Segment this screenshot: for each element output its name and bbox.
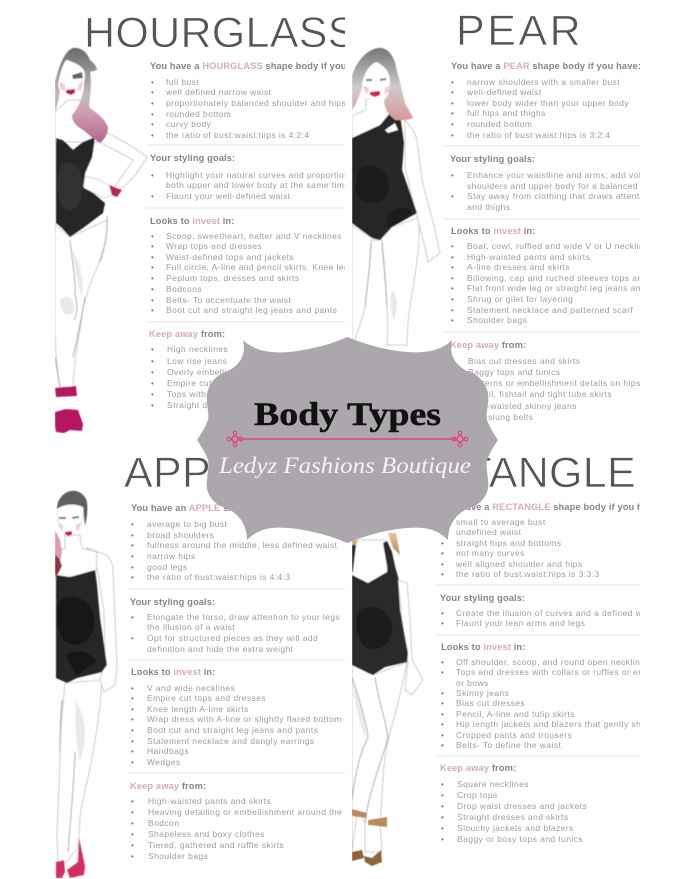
list: rectangle keep away: •: [441, 791, 444, 800]
list: rectangle traits: small to average bust: [456, 517, 546, 527]
list: pear looks: Flat front wide leg or straight leg jeans and: [467, 283, 646, 293]
list: apple keep away: •: [131, 841, 134, 850]
list: pear traits: •: [451, 99, 454, 108]
list: rectangle traits: •: [441, 560, 444, 569]
badge plaque: [197, 337, 498, 543]
heading: keep away from: Keep away from:: [130, 781, 206, 791]
list: apple styling goals: the illusion of a waist: [147, 622, 235, 632]
list: apple traits: •: [131, 573, 134, 582]
list: pear looks: High-waisted pants and skirts: [467, 252, 590, 262]
list: apple keep away: Shapeless and boxy clothes: [148, 829, 265, 839]
list: hourglass looks: [151, 233, 345, 314]
list: rectangle keep away: Straight dresses and skirts: [457, 812, 568, 822]
list: pear traits: rounded bottom: [467, 119, 532, 129]
list: apple looks: •: [131, 715, 134, 724]
list: rectangle looks: Tops and dresses with collars or ruffles or embellishments: [456, 667, 696, 677]
list: rectangle keep away: [441, 779, 587, 844]
list: hourglass keep away: •: [151, 368, 154, 377]
list: hourglass keep away: •: [151, 390, 154, 399]
heading: keep away from: Keep away from:: [149, 329, 225, 339]
list: hourglass looks: •: [151, 296, 154, 305]
list: rectangle keep away: •: [441, 824, 444, 833]
list: hourglass keep away: •: [151, 345, 154, 354]
heading: looks to invest in: Looks to invest in:: [441, 642, 525, 652]
list: pear styling goals: •: [451, 171, 454, 180]
list: hourglass looks: •: [151, 285, 154, 294]
figure: hourglass illustration: [55, 48, 147, 433]
list: pear traits: full hips and thighs: [467, 108, 546, 118]
list: apple looks: •: [131, 705, 134, 714]
list: hourglass looks: •: [151, 232, 154, 241]
list: pear keep away: Patterns or embellishment details on hips: [468, 378, 641, 388]
list: apple traits: •: [131, 552, 134, 561]
list: hourglass styling goals: both upper and lower body at the same time: [166, 180, 350, 190]
list: pear traits: •: [451, 88, 454, 97]
list: hourglass traits: •: [151, 120, 154, 129]
list: apple keep away: [131, 796, 342, 861]
list: apple styling goals: •: [131, 634, 134, 643]
list: rectangle styling goals: Create the illusion of curves and a defined waist: [456, 608, 657, 618]
list: rectangle looks: Pencil, A-line and tulip skirts: [456, 709, 575, 719]
list: hourglass keep away: Low rise jeans: [167, 356, 227, 366]
list: apple looks: •: [131, 694, 134, 703]
list: rectangle looks: •: [441, 720, 444, 729]
list: hourglass looks: Full circle, A-line and pencil skirts. Knee length: [166, 262, 362, 272]
list: rectangle traits: not many curves: [456, 548, 525, 558]
list: pear traits: the ratio of bust:waist:hips is 3:2:4: [467, 130, 611, 140]
list: pear traits: •: [451, 109, 454, 118]
list: pear looks: Shrug or gilet for layering: [467, 294, 573, 304]
list: rectangle keep away: Baggy or boxy tops and tunics: [457, 834, 583, 844]
list: apple looks: V and wide necklines: [147, 683, 235, 693]
badge title: Body Types: [254, 397, 441, 433]
list: hourglass styling goals: •: [151, 171, 154, 180]
list: rectangle styling goals: •: [441, 619, 444, 628]
ornamental divider: [227, 431, 468, 447]
list: hourglass keep away: Overly embellished tops: [167, 367, 267, 377]
list: hourglass keep away: •: [151, 379, 154, 388]
list: apple looks: Knee length A-line skirts: [147, 704, 249, 714]
list: pear looks: •: [451, 295, 454, 304]
panel: rectangle: [352, 449, 696, 866]
list: hourglass traits: •: [151, 110, 154, 119]
list: hourglass traits: rounded bottom: [166, 109, 231, 119]
title: pear: PEAR: [456, 7, 581, 55]
panel: apple: [55, 449, 345, 878]
list: hourglass traits: full bust: [166, 77, 199, 87]
list: rectangle styling goals: [441, 610, 640, 628]
list: rectangle keep away: Slouchy jackets and blazers: [457, 823, 574, 833]
list: pear styling goals: •: [451, 192, 454, 201]
list: apple traits: •: [131, 563, 134, 572]
list: rectangle keep away: •: [441, 780, 444, 789]
list: apple traits: the ratio of bust:waist:hips is 4:4:3: [147, 572, 291, 582]
list: apple traits: •: [131, 531, 134, 540]
list: rectangle traits: straight hips and bottoms: [456, 538, 561, 548]
list: apple keep away: •: [131, 852, 134, 861]
list: hourglass looks: Wrap tops and dresses: [166, 241, 262, 251]
heading: keep away from: Keep away from:: [440, 763, 516, 773]
list: apple looks: •: [131, 684, 134, 693]
list: hourglass traits: •: [151, 131, 154, 140]
list: pear traits: •: [451, 120, 454, 129]
list: hourglass traits: •: [151, 99, 154, 108]
list: rectangle looks: Bias cut dresses: [456, 698, 525, 708]
list: hourglass keep away: •: [151, 357, 154, 366]
list: hourglass looks: Bodcons: [166, 284, 202, 294]
list: pear traits: well-defined waist: [466, 87, 542, 97]
list: hourglass keep away: [151, 346, 228, 410]
heading: styling goals: Your styling goals:: [130, 597, 215, 607]
list: pear looks: Shoulder bags: [467, 315, 527, 325]
list: rectangle looks: •: [441, 689, 444, 698]
list: pear looks: •: [451, 316, 454, 325]
list: rectangle looks: [441, 657, 696, 750]
list: pear traits: lower body wider than your upper body: [467, 98, 629, 108]
heading: styling goals: Your styling goals:: [450, 154, 535, 164]
list: rectangle looks: Belts- To define the waist: [456, 740, 561, 750]
list: pear styling goals: [451, 172, 640, 212]
list: pear looks: A-line dresses and skirts: [467, 262, 570, 272]
heading: keep away from: Keep away from:: [450, 340, 526, 350]
list: hourglass keep away: Tops with details: [167, 389, 237, 399]
list: rectangle traits: •: [441, 570, 444, 579]
list: apple traits: good legs: [147, 562, 188, 572]
list: rectangle traits: •: [441, 539, 444, 548]
list: rectangle traits: undefined waist: [456, 527, 522, 537]
list: hourglass looks: •: [151, 263, 154, 272]
heading: looks to invest in: Looks to invest in:: [451, 226, 535, 236]
list: hourglass looks: Belts- To accentuate the waist: [166, 295, 292, 305]
list: hourglass keep away: High necklines: [167, 344, 228, 354]
list: hourglass traits: [151, 77, 346, 140]
list: hourglass styling goals: •: [151, 192, 154, 201]
list: apple traits: •: [131, 520, 134, 529]
list: apple traits: average to big bust: [147, 519, 227, 529]
list: pear keep away: Low-slung belts: [468, 412, 533, 422]
list: pear looks: Boat, cowl, ruffled and wide V or U necklines: [467, 241, 654, 251]
heading: styling goals: Your styling goals:: [150, 153, 235, 163]
list: rectangle looks: •: [441, 699, 444, 708]
list: apple keep away: •: [131, 808, 134, 817]
list: apple traits: broad shoulders: [147, 530, 214, 540]
list: rectangle keep away: Square necklines: [457, 779, 529, 789]
list: apple traits: [131, 519, 338, 582]
list: apple keep away: •: [131, 819, 134, 828]
list: pear looks: •: [451, 306, 454, 315]
list: rectangle looks: •: [441, 668, 444, 677]
figure: pear illustration: [352, 48, 440, 345]
list: rectangle traits: the ratio of bust:waist:hips is 3:3:3: [456, 569, 600, 579]
list: hourglass keep away: Empire cut tops: [167, 378, 232, 388]
list: apple keep away: High-waisted pants and skirts: [148, 796, 271, 806]
list: pear looks: •: [451, 274, 454, 283]
list: hourglass traits: proportionately balanced shoulder and hips: [166, 98, 346, 108]
list: pear styling goals: shoulders and upper body for a balanced look: [467, 181, 658, 191]
list: hourglass looks: •: [151, 306, 154, 315]
list: apple styling goals: Elongate the torso, draw attention to your legs: [147, 612, 340, 622]
list: rectangle keep away: •: [441, 835, 444, 844]
list: apple keep away: Heaving detailing or embellishment around the: [148, 807, 342, 817]
figure: apple illustration: [55, 491, 117, 878]
list: rectangle traits: well aligned shoulder and hips: [455, 559, 582, 569]
list: rectangle looks: •: [441, 658, 444, 667]
list: pear looks: Billowing, cap and ruched sleeves tops and: [467, 273, 648, 283]
list: rectangle keep away: •: [441, 813, 444, 822]
list: rectangle styling goals: •: [441, 609, 444, 618]
list: apple looks: Wrap dress with A-line or slightly flared bottom: [147, 714, 342, 724]
list: rectangle looks: or bows: [456, 678, 489, 688]
heading: styling goals: Your styling goals:: [440, 593, 525, 603]
badge subtitle: Ledyz Fashions Boutique: [218, 453, 471, 478]
list: hourglass traits: the ratio of bust:waist:hips is 4:2:4: [166, 130, 310, 140]
list: rectangle looks: •: [441, 710, 444, 719]
list: pear looks: •: [451, 242, 454, 251]
list: pear keep away: [468, 358, 640, 422]
list: apple traits: narrow hips: [147, 551, 196, 561]
list: hourglass looks: Waist-defined tops and jackets: [166, 252, 294, 262]
list: hourglass traits: well defined narrow waist: [165, 87, 272, 97]
title: rectangle: RECTANGLE: [374, 449, 636, 497]
list: apple looks: Handbags: [147, 746, 189, 756]
list: rectangle traits: •: [441, 549, 444, 558]
list: apple traits: fullness around the middle, less defined waist: [147, 540, 338, 550]
list: pear looks: [451, 241, 654, 325]
list: hourglass styling goals: Flaunt your well-defined waist: [166, 191, 291, 201]
list: pear styling goals: Enhance your waistline and arms; add volume to: [467, 170, 670, 180]
panel: pear: [352, 7, 683, 422]
intro heading: You have a HOURGLASS shape body if you: [150, 61, 347, 71]
list: apple styling goals: •: [131, 613, 134, 622]
list: hourglass looks: Peplum tops, dresses and skirts: [166, 273, 300, 283]
heading: looks to invest in: Looks to invest in:: [131, 667, 215, 677]
list: pear keep away: Baggy tops and tunics: [468, 367, 560, 377]
central badge: [197, 337, 498, 543]
list: rectangle keep away: Drop waist dresses and jackets: [457, 801, 587, 811]
title: hourglass: HOURGLASS: [84, 9, 357, 57]
list: apple keep away: •: [131, 797, 134, 806]
list: hourglass looks: Boot cut and straight leg jeans and pants: [166, 305, 337, 315]
list: apple traits: •: [131, 541, 134, 550]
list: pear looks: •: [451, 263, 454, 272]
intro heading: You have an APPLE shape body if you have:: [131, 503, 332, 513]
list: pear keep away: Pencil, fishtail and tight tube skirts: [468, 389, 612, 399]
figure: rectangle illustration: [352, 533, 423, 866]
list: rectangle styling goals: Flaunt your lean arms and legs: [456, 618, 585, 628]
list: rectangle looks: Cropped pants and trousers: [456, 730, 572, 740]
list: hourglass traits: •: [151, 78, 154, 87]
list: rectangle traits: [441, 517, 600, 579]
list: hourglass looks: Scoop, sweetheart, halter and V necklines: [166, 231, 342, 241]
list: rectangle looks: •: [441, 741, 444, 750]
list: hourglass styling goals: Highlight your natural curves and proportions: [166, 170, 354, 180]
list: pear looks: •: [451, 284, 454, 293]
list: pear keep away: •: [452, 357, 455, 366]
list: apple styling goals: [131, 612, 340, 654]
list: pear traits: •: [451, 131, 454, 140]
list: pear looks: •: [451, 253, 454, 262]
list: pear styling goals: Stay away from clothing that draws attention to hips: [467, 191, 683, 201]
list: pear traits: narrow shoulders with a smaller bust: [467, 77, 620, 87]
list: apple looks: Boot cut and straight leg jeans and pants: [147, 725, 318, 735]
list: hourglass styling goals: [151, 172, 345, 200]
list: hourglass looks: •: [151, 242, 154, 251]
list: apple looks: Statement necklace and dangly earrings: [147, 736, 315, 746]
list: apple looks: •: [131, 726, 134, 735]
list: apple styling goals: definition and hide the extra weight: [147, 644, 294, 654]
list: hourglass looks: •: [151, 274, 154, 283]
list: rectangle looks: •: [441, 731, 444, 740]
list: apple styling goals: Opt for structured pieces as they will add: [147, 633, 318, 643]
list: apple looks: •: [131, 758, 134, 767]
list: apple keep away: Bodcon: [148, 818, 179, 828]
list: pear styling goals: and thighs: [467, 202, 510, 212]
list: pear keep away: High-waisted skinny jeans: [468, 401, 577, 411]
list: hourglass traits: curvy body: [166, 119, 212, 129]
list: hourglass keep away: Straight dresses: [167, 400, 235, 410]
list: apple looks: •: [131, 747, 134, 756]
list: rectangle keep away: •: [441, 802, 444, 811]
list: pear traits: •: [451, 78, 454, 87]
list: apple keep away: •: [131, 830, 134, 839]
intro heading: You have a PEAR shape body if you have:: [451, 61, 641, 71]
list: pear traits: [451, 77, 629, 140]
list: apple looks: Wedges: [147, 757, 181, 767]
list: apple keep away: Shoulder bags: [148, 851, 208, 861]
list: apple looks: [131, 683, 342, 767]
list: pear looks: Statement necklace and patterned scarf: [467, 305, 633, 315]
list: rectangle keep away: Crop tops: [457, 790, 498, 800]
list: apple keep away: Tiered, gathered and ruffle skirts: [148, 840, 284, 850]
list: rectangle looks: Hip length jackets and blazers that gently shape: [456, 719, 657, 729]
title: apple: APPLE: [124, 449, 264, 497]
list: rectangle looks: Off shoulder, scoop, and round open necklines: [456, 657, 650, 667]
list: hourglass looks: •: [151, 253, 154, 262]
panel: hourglass: [55, 9, 362, 433]
list: pear keep away: Bias cut dresses and skirts: [468, 356, 580, 366]
list: apple looks: Empire cut tops and dresses: [147, 693, 266, 703]
list: apple looks: •: [131, 737, 134, 746]
list: hourglass keep away: •: [151, 401, 154, 410]
intro heading: You have a RECTANGLE shape body if you have:: [440, 502, 662, 512]
list: hourglass traits: •: [151, 88, 154, 97]
list: rectangle looks: Skinny jeans: [456, 688, 509, 698]
heading: looks to invest in: Looks to invest in:: [150, 216, 234, 226]
